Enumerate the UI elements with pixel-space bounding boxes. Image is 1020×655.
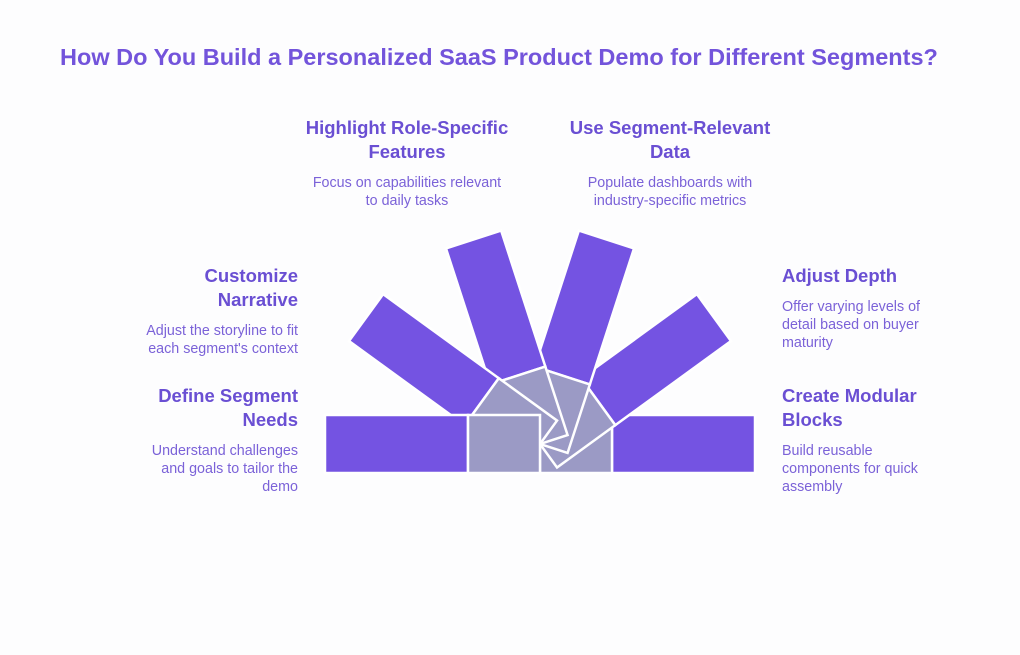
text: define segment needs: demo: [262, 479, 298, 495]
text: customize narrative: [146, 265, 298, 357]
text: create modular blocks: Blocks: [782, 409, 843, 430]
title: How Do You Build a Personalized SaaS Product Demo for Different Segments?: [60, 44, 938, 70]
text: use segment-relevant data: industry-specific metrics: [594, 193, 746, 209]
text: highlight role-specific features: Highlight Role-Specific: [306, 117, 508, 138]
text: use segment-relevant data: Use Segment-Relevant: [570, 117, 770, 138]
text: create modular blocks: assembly: [782, 479, 842, 495]
text: create modular blocks: [782, 385, 918, 495]
arm: customize narrative: [349, 294, 557, 467]
text: adjust depth: detail based on buyer: [782, 317, 919, 333]
text: define segment needs: Define Segment: [158, 385, 298, 406]
text: use segment-relevant data: Populate dashboards with: [588, 175, 752, 191]
arm: create modular blocks: [540, 415, 755, 473]
arm: adjust depth: [523, 294, 731, 467]
text: highlight role-specific features: Focus on capabilities relevant: [313, 175, 501, 191]
text: adjust depth: [782, 265, 920, 351]
arm: define segment needs: [325, 415, 540, 473]
text: define segment needs: Needs: [242, 409, 298, 430]
arm: use segment-relevant data: [512, 231, 634, 453]
text: create modular blocks: components for quick: [782, 461, 918, 477]
text: adjust depth: Offer varying levels of: [782, 299, 920, 315]
text: highlight role-specific features: Features: [368, 141, 446, 162]
text: create modular blocks: Create Modular: [782, 385, 917, 406]
text: define segment needs: [152, 385, 298, 495]
text: customize narrative: Customize: [204, 265, 298, 286]
text: customize narrative: each segment's context: [148, 341, 298, 357]
text: define segment needs: Understand challenges: [152, 443, 298, 459]
arm: highlight role-specific features: [446, 231, 568, 453]
text: highlight role-specific features: to daily tasks: [366, 193, 448, 209]
text: create modular blocks: Build reusable: [782, 443, 873, 459]
text: customize narrative: Adjust the storyline to fit: [146, 323, 298, 339]
text: adjust depth: Adjust Depth: [782, 265, 897, 286]
text: define segment needs: and goals to tailor the: [161, 461, 298, 477]
text: highlight role-specific features: [306, 117, 508, 209]
text: use segment-relevant data: Data: [650, 141, 690, 162]
text: use segment-relevant data: [570, 117, 770, 209]
text: customize narrative: Narrative: [218, 289, 298, 310]
text: adjust depth: maturity: [782, 335, 833, 351]
